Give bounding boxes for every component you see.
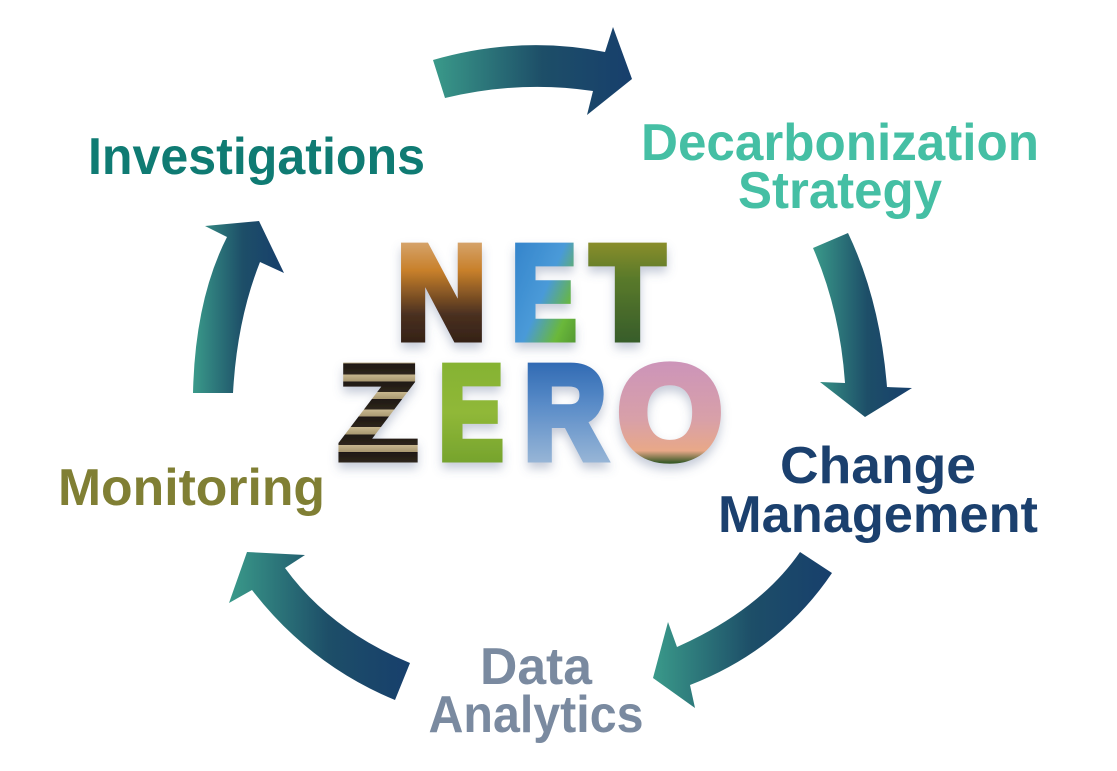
arrow: top (investigations to decarbonization) xyxy=(433,27,632,115)
center logo: NET ZERO: E xyxy=(512,219,576,366)
heading: Change Management: Management xyxy=(718,486,1038,544)
center logo: NET ZERO: R xyxy=(524,339,606,486)
center logo: NET ZERO: T xyxy=(591,219,664,366)
center logo: NET ZERO: O xyxy=(618,339,722,486)
heading: Data Analytics: Analytics xyxy=(428,686,644,744)
center logo: NET ZERO: N xyxy=(397,219,486,366)
heading: Change Management: Change xyxy=(780,437,976,495)
heading: Decarbonization Strategy: Strategy xyxy=(738,162,942,220)
heading: Decarbonization Strategy xyxy=(641,114,1039,220)
center logo: NET ZERO: Z xyxy=(339,339,417,486)
center logo: NET ZERO: E xyxy=(439,339,503,486)
heading: Change Management xyxy=(718,437,1038,544)
arrow: bottom left (data analytics to monitoring) xyxy=(229,552,410,700)
arrow: bottom right (change management to data analytics) xyxy=(653,552,832,708)
heading: Data Analytics xyxy=(428,638,644,744)
arrow: right (decarbonization to change management) xyxy=(813,233,912,417)
heading: Data Analytics: Data xyxy=(480,638,593,696)
center logo: NET ZERO xyxy=(339,219,722,486)
arrow: left (monitoring to investigations) xyxy=(193,221,284,393)
heading: Decarbonization Strategy: Decarbonization xyxy=(641,114,1039,172)
heading: Monitoring: Monitoring xyxy=(58,459,325,517)
heading: Investigations: Investigations xyxy=(88,128,425,186)
